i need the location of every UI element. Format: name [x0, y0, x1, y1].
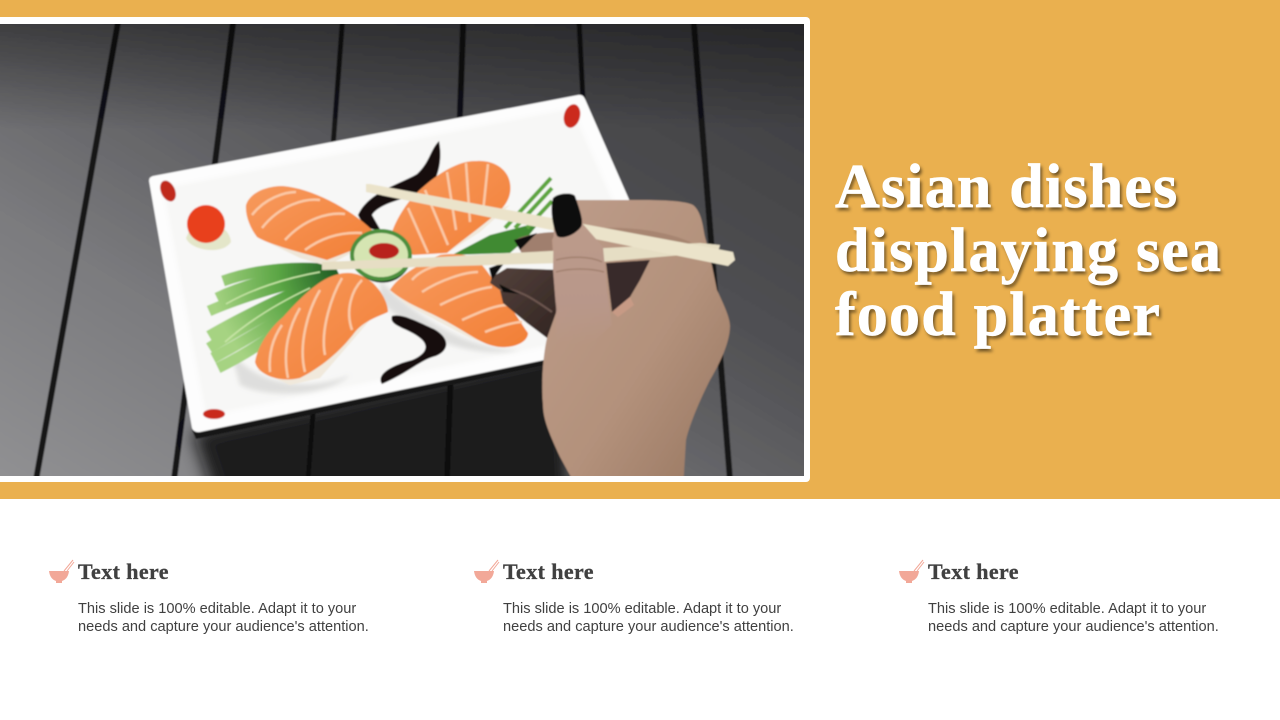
shadowed fingers: [489, 232, 565, 338]
icon: rice bowl with chopsticks: [49, 560, 74, 583]
title: displaying sea: [835, 217, 1222, 285]
title: [835, 153, 1224, 354]
body text: [928, 601, 1219, 635]
wooden table: [0, 24, 804, 476]
chopstick: upper: [366, 184, 735, 266]
body text: This slide is 100% editable. Adapt it to your: [503, 601, 781, 617]
soy sauce swirls: [358, 141, 446, 384]
heading: Text here: [78, 559, 169, 584]
orange header band: [0, 0, 1280, 499]
white photo frame: [0, 17, 810, 482]
icon: rice bowl with chopsticks: [899, 560, 924, 583]
body text: This slide is 100% editable. Adapt it to your: [928, 601, 1206, 617]
chopstick: lower: [322, 243, 720, 270]
red dots and wasabi garnish: [157, 102, 583, 419]
body text: needs and capture your audience's attention.: [928, 619, 1219, 635]
heading: Text here: [928, 559, 1019, 584]
cucumber slice: [350, 229, 412, 283]
sushi: top right: [392, 161, 510, 255]
column 2: text block: [474, 559, 794, 635]
icon: rice bowl with chopsticks: [474, 560, 500, 583]
column 3: text block: [899, 559, 1219, 635]
column 1: text block: [49, 559, 369, 635]
body text: [503, 601, 794, 635]
sushi: bottom right: [390, 254, 528, 348]
hand: back and index finger: [542, 200, 730, 490]
body text: This slide is 100% editable. Adapt it to your: [78, 601, 356, 617]
cucumber leaf garnish left: [209, 268, 342, 368]
title: food platter: [835, 281, 1161, 349]
body text: needs and capture your audience's attention.: [503, 619, 794, 635]
plate shadow: [178, 364, 570, 476]
cucumber leaf garnish right: [452, 178, 552, 255]
heading: Text here: [503, 559, 594, 584]
sushi: top left: [246, 186, 372, 266]
photo: sushi platter and hand with chopsticks: [0, 24, 804, 476]
sushi: bottom left: [255, 273, 388, 385]
body text: needs and capture your audience's attention.: [78, 619, 369, 635]
body text: [78, 601, 369, 635]
white plate: [149, 95, 660, 439]
title: Asian dishes: [835, 153, 1178, 221]
thumb with black nail: [550, 192, 607, 312]
